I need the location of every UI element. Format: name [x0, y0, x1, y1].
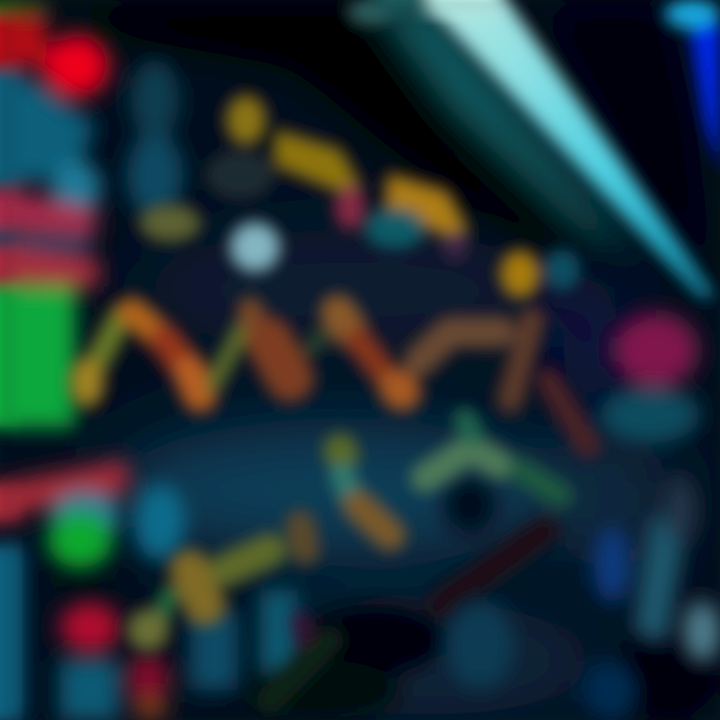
black top band: [50, 0, 720, 300]
left edge colour bands: [0, 0, 22, 720]
lower yellow green lines: [128, 420, 560, 700]
yellow blobs top: [140, 96, 580, 297]
base haze: [110, 230, 670, 715]
magenta blob right: [600, 314, 700, 443]
blue glow top right: [666, 0, 720, 170]
top edge of light beam: [375, 0, 502, 26]
lower right glints: [446, 476, 720, 720]
light beam: [348, 0, 716, 298]
orange wave line: [71, 310, 588, 445]
left column blocks: [0, 0, 298, 720]
dark gaps: [45, 477, 720, 720]
